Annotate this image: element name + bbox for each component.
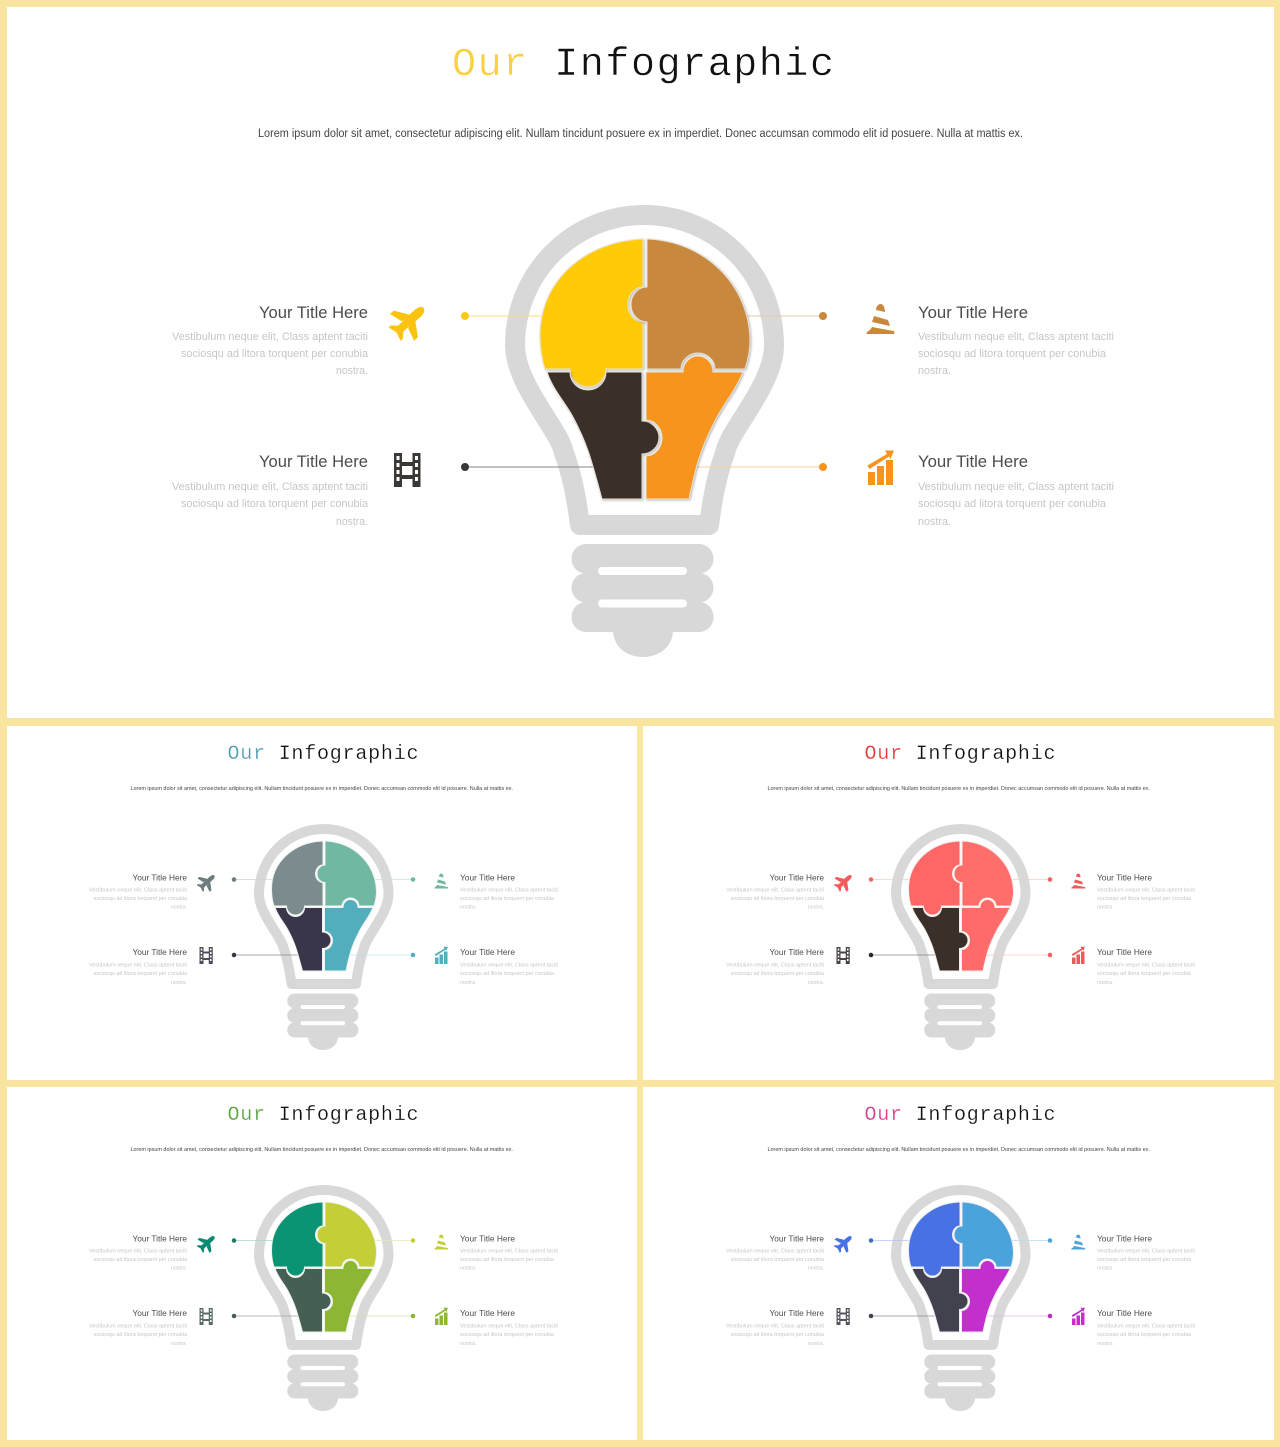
puzzle bulb pieces bbox=[272, 1202, 376, 1332]
icon: film bbox=[394, 453, 420, 487]
title: Our Infographic bbox=[228, 1104, 418, 1127]
text block: top right: Vestibulum neque elit, Class aptent taciti bbox=[1097, 888, 1195, 894]
text block: bottom left: sociosqu ad litora torquent per conubia bbox=[730, 971, 825, 977]
connector dots bbox=[869, 877, 1052, 957]
icon: cone bbox=[434, 1234, 448, 1250]
connector lines bbox=[465, 316, 823, 467]
text block: top right: sociosqu ad litora torquent per conubia bbox=[1097, 1257, 1192, 1263]
subtitle: Lorem ipsum dolor sit amet, consectetur adipiscing elit. Nullam tincidunt posuere ex in imperdiet. Donec accumsan commodo elit id posuere. Nulla at mattis ex. bbox=[130, 1147, 513, 1153]
text block: bottom right: nostra. bbox=[918, 516, 951, 528]
text block: bottom right: sociosqu ad litora torquent per conubia bbox=[1097, 971, 1192, 977]
text block: bottom left: Your Title Here bbox=[770, 947, 824, 957]
text block: top left bbox=[89, 1234, 188, 1272]
panel: teal variant bbox=[7, 726, 637, 1080]
text block: top right: nostra. bbox=[1097, 1266, 1114, 1272]
text block: bottom right bbox=[918, 452, 1114, 528]
text block: bottom left: Vestibulum neque elit, Class aptent taciti bbox=[89, 1324, 187, 1330]
text block: bottom right: nostra. bbox=[460, 1341, 477, 1347]
connector dots bbox=[869, 1238, 1052, 1318]
text block: top left: sociosqu ad litora torquent per conubia bbox=[730, 896, 825, 902]
light bulb outline bbox=[259, 1190, 388, 1411]
text block: bottom left: nostra. bbox=[171, 980, 187, 986]
text block: bottom left: nostra. bbox=[808, 1341, 824, 1347]
light bulb outline bbox=[896, 1190, 1026, 1411]
puzzle bulb pieces bbox=[908, 1202, 1014, 1332]
text block: top right: nostra. bbox=[918, 365, 951, 377]
title: Our Infographic bbox=[864, 743, 1056, 766]
text block: top left: Vestibulum neque elit, Class aptent taciti bbox=[172, 331, 368, 343]
icon: cone bbox=[434, 874, 448, 888]
connector dots bbox=[232, 1238, 415, 1318]
text block: top left: nostra. bbox=[808, 1266, 824, 1272]
subtitle: Lorem ipsum dolor sit amet, consectetur adipiscing elit. Nullam tincidunt posuere ex in imperdiet. Donec accumsan commodo elit id posuere. Nulla at mattis ex. bbox=[768, 786, 1150, 792]
text block: bottom right: nostra. bbox=[460, 980, 477, 986]
text block: top right bbox=[460, 872, 558, 910]
text block: top left bbox=[89, 872, 188, 910]
icon: chart bbox=[1072, 947, 1085, 964]
text block: bottom right: Vestibulum neque elit, Class aptent taciti bbox=[1097, 962, 1195, 968]
puzzle bulb pieces bbox=[908, 841, 1014, 971]
text block: bottom left: Your Title Here bbox=[770, 1308, 824, 1318]
text block: bottom left: Your Title Here bbox=[132, 947, 187, 957]
icon: chart bbox=[868, 450, 894, 485]
panel: main yellow infographic bbox=[7, 7, 1274, 718]
text block: top right bbox=[1097, 1234, 1195, 1272]
text block: bottom right: Your Title Here bbox=[460, 947, 515, 957]
text block: top left bbox=[172, 303, 369, 377]
icon: chart bbox=[435, 1308, 448, 1325]
icon: film bbox=[836, 947, 850, 964]
text block: top left: sociosqu ad litora torquent per conubia bbox=[94, 1257, 188, 1263]
text block: top left: Vestibulum neque elit, Class aptent taciti bbox=[89, 1248, 187, 1254]
subtitle: Lorem ipsum dolor sit amet, consectetur adipiscing elit. Nullam tincidunt posuere ex in imperdiet. Donec accumsan commodo elit id posuere. Nulla at mattis ex. bbox=[130, 786, 513, 792]
text block: top right: Vestibulum neque elit, Class aptent taciti bbox=[460, 1248, 558, 1254]
text block: bottom left bbox=[89, 947, 188, 986]
panel: blue and magenta variant bbox=[643, 1087, 1274, 1440]
text block: top right: Your Title Here bbox=[1097, 872, 1152, 882]
icon: chart bbox=[435, 947, 448, 964]
text block: top right: Vestibulum neque elit, Class aptent taciti bbox=[918, 331, 1114, 343]
connector lines bbox=[871, 880, 1050, 955]
text block: bottom right: sociosqu ad litora torquent per conubia bbox=[460, 1332, 555, 1338]
subtitle: Lorem ipsum dolor sit amet, consectetur adipiscing elit. Nullam tincidunt posuere ex in imperdiet. Donec accumsan commodo elit id posuere. Nulla at mattis ex. bbox=[258, 128, 1023, 140]
text block: bottom left: nostra. bbox=[808, 980, 824, 986]
text block: top right: sociosqu ad litora torquent per conubia bbox=[460, 1257, 555, 1263]
text block: top right: Your Title Here bbox=[460, 872, 515, 882]
text block: bottom left: nostra. bbox=[336, 516, 368, 528]
text block: bottom right: nostra. bbox=[1097, 1341, 1114, 1347]
icon: plane bbox=[831, 869, 857, 895]
text block: top right: Your Title Here bbox=[1097, 1234, 1152, 1244]
connector lines bbox=[871, 1240, 1050, 1316]
icon: cone bbox=[1071, 874, 1085, 888]
text block: bottom left bbox=[89, 1308, 188, 1347]
text block: bottom left: Your Title Here bbox=[132, 1308, 187, 1318]
text block: bottom right bbox=[1097, 947, 1195, 986]
text block: top right: Vestibulum neque elit, Class aptent taciti bbox=[1097, 1248, 1195, 1254]
panel: green variant bbox=[7, 1087, 637, 1440]
text block: bottom left: Vestibulum neque elit, Class aptent taciti bbox=[726, 962, 824, 968]
text block: bottom left: sociosqu ad litora torquent per conubia bbox=[730, 1332, 825, 1338]
text block: top left: Your Title Here bbox=[132, 872, 187, 882]
text block: bottom left: Vestibulum neque elit, Class aptent taciti bbox=[172, 481, 368, 493]
text block: top left: Vestibulum neque elit, Class aptent taciti bbox=[726, 1248, 824, 1254]
text block: top left: Your Title Here bbox=[770, 1234, 824, 1244]
text block: top left: Your Title Here bbox=[770, 872, 824, 882]
text block: bottom left: Vestibulum neque elit, Class aptent taciti bbox=[89, 962, 187, 968]
text block: bottom right bbox=[460, 1308, 558, 1347]
icon: plane bbox=[194, 1230, 220, 1256]
text block: top left: sociosqu ad litora torquent per conubia bbox=[94, 896, 188, 902]
text block: bottom right: Your Title Here bbox=[460, 1308, 515, 1318]
text block: top right: Your Title Here bbox=[918, 303, 1028, 322]
text block: top left: nostra. bbox=[336, 365, 368, 377]
title: Our Infographic bbox=[228, 743, 418, 766]
icon: film bbox=[200, 1308, 213, 1325]
text block: top right bbox=[918, 303, 1114, 377]
text block: top left: nostra. bbox=[808, 904, 824, 910]
text block: bottom right: Vestibulum neque elit, Class aptent taciti bbox=[918, 481, 1114, 493]
text block: top left: nostra. bbox=[171, 1266, 187, 1272]
light bulb outline bbox=[896, 829, 1026, 1050]
light bulb outline bbox=[259, 829, 388, 1050]
text block: top left bbox=[726, 1234, 825, 1272]
text block: top left: Vestibulum neque elit, Class aptent taciti bbox=[726, 888, 824, 894]
text block: bottom left: nostra. bbox=[171, 1341, 187, 1347]
text block: top right: Your Title Here bbox=[460, 1234, 515, 1244]
subtitle: Lorem ipsum dolor sit amet, consectetur adipiscing elit. Nullam tincidunt posuere ex in imperdiet. Donec accumsan commodo elit id posuere. Nulla at mattis ex. bbox=[768, 1147, 1150, 1153]
text block: top left: Vestibulum neque elit, Class aptent taciti bbox=[89, 888, 187, 894]
icon: cone bbox=[866, 304, 894, 334]
connector lines bbox=[234, 880, 413, 955]
text block: top right: nostra. bbox=[460, 904, 477, 910]
connector dots bbox=[232, 877, 415, 957]
text block: top left: nostra. bbox=[171, 904, 187, 910]
icon: plane bbox=[194, 869, 220, 895]
icon: chart bbox=[1072, 1308, 1085, 1325]
text block: bottom right: Your Title Here bbox=[918, 452, 1028, 471]
text block: bottom left: Vestibulum neque elit, Class aptent taciti bbox=[726, 1324, 824, 1330]
text block: bottom right bbox=[1097, 1308, 1195, 1347]
text block: bottom left bbox=[172, 452, 369, 528]
text block: bottom left: sociosqu ad litora torquent per conubia bbox=[181, 498, 369, 510]
puzzle bulb pieces bbox=[272, 841, 376, 971]
text block: top left: Your Title Here bbox=[132, 1234, 187, 1244]
connector lines bbox=[234, 1240, 413, 1316]
text block: top left: sociosqu ad litora torquent per conubia bbox=[181, 348, 369, 360]
text block: bottom right: Vestibulum neque elit, Class aptent taciti bbox=[460, 962, 558, 968]
text block: bottom left bbox=[726, 947, 825, 986]
icon: film bbox=[836, 1308, 850, 1325]
text block: top right: nostra. bbox=[460, 1266, 477, 1272]
text block: bottom left: sociosqu ad litora torquent per conubia bbox=[94, 1332, 188, 1338]
text block: top right: Vestibulum neque elit, Class aptent taciti bbox=[460, 888, 558, 894]
text block: bottom left: Your Title Here bbox=[259, 452, 368, 471]
icon: plane bbox=[831, 1230, 857, 1256]
text block: top left: sociosqu ad litora torquent per conubia bbox=[730, 1257, 825, 1263]
text block: bottom right: sociosqu ad litora torquent per conubia bbox=[460, 971, 555, 977]
text block: top left bbox=[726, 872, 825, 910]
connector dots bbox=[461, 312, 827, 471]
text block: bottom right: Vestibulum neque elit, Class aptent taciti bbox=[460, 1324, 558, 1330]
icon: film bbox=[200, 947, 213, 964]
panel: red variant bbox=[643, 726, 1274, 1080]
title: Our Infographic bbox=[864, 1104, 1056, 1127]
text block: bottom left: sociosqu ad litora torquent per conubia bbox=[94, 971, 188, 977]
text block: top right: sociosqu ad litora torquent per conubia bbox=[1097, 896, 1192, 902]
text block: bottom right: Your Title Here bbox=[1097, 1308, 1152, 1318]
text block: bottom left bbox=[726, 1308, 825, 1347]
text block: bottom right: sociosqu ad litora torquent per conubia bbox=[1097, 1332, 1192, 1338]
icon: plane bbox=[383, 295, 436, 347]
text block: top right: nostra. bbox=[1097, 904, 1114, 910]
text block: top left: Your Title Here bbox=[259, 303, 368, 322]
text block: top right bbox=[1097, 872, 1195, 910]
text block: top right bbox=[460, 1234, 558, 1272]
puzzle bulb pieces bbox=[540, 239, 750, 499]
text block: bottom right: Your Title Here bbox=[1097, 947, 1152, 957]
text block: bottom right: nostra. bbox=[1097, 980, 1114, 986]
text block: top right: sociosqu ad litora torquent per conubia bbox=[918, 348, 1107, 360]
icon: cone bbox=[1071, 1234, 1085, 1250]
title: Our Infographic bbox=[452, 43, 834, 88]
text block: bottom right: Vestibulum neque elit, Class aptent taciti bbox=[1097, 1324, 1195, 1330]
text block: bottom right: sociosqu ad litora torquent per conubia bbox=[918, 498, 1107, 510]
text block: bottom right bbox=[460, 947, 558, 986]
light bulb outline bbox=[515, 215, 774, 657]
text block: top right: sociosqu ad litora torquent per conubia bbox=[460, 896, 555, 902]
